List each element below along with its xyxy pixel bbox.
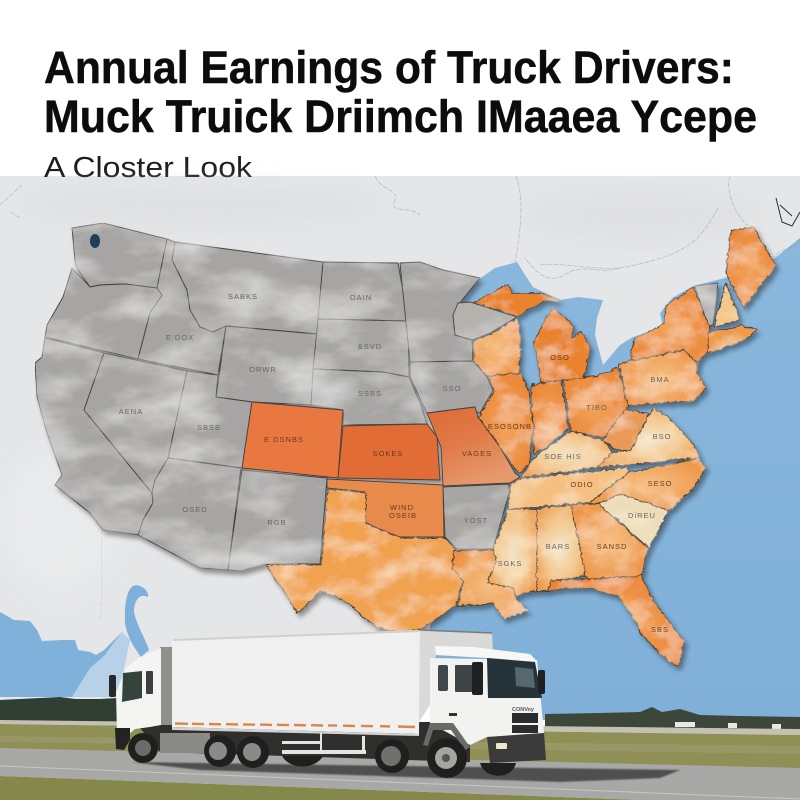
wisconsin south [472,318,520,375]
road [0,748,800,800]
michigan upper [472,283,560,315]
truck shadow [130,762,680,782]
west virginia [603,408,648,450]
state labels: BMA [650,375,670,384]
tree line right [545,707,800,730]
state labels: SOKES [373,449,403,458]
rear cab wheel [128,733,158,763]
rear cab [109,648,161,750]
ohio [562,367,627,437]
state labels: BSO [653,432,671,441]
door window [455,665,483,692]
florida [547,575,683,665]
bottom grass [0,776,800,800]
state labels: SBSB [197,423,221,432]
rear bumper [115,728,130,750]
michigan lower [533,307,590,382]
rear side window [438,665,448,691]
pacific inlet left [0,612,122,697]
tennessee [507,467,627,508]
land mottling [0,187,760,590]
oregon [45,268,162,359]
fuel tank [160,733,210,753]
title [44,42,757,142]
windshield [487,658,542,698]
oklahoma [327,479,444,537]
south dakota [313,319,409,377]
tree line left [0,697,117,722]
utah [168,371,252,468]
state labels: SABKS [228,292,258,301]
nevada [84,353,187,493]
state labels: DiREU [628,511,656,520]
california [35,338,153,535]
south carolina [598,493,668,547]
right mirror [538,670,545,694]
front bumper [487,733,546,763]
indiana [530,378,568,453]
state labels: E.DOX [166,333,194,342]
state labels: TIBO [586,403,608,412]
front wheel [427,738,467,778]
virginia [595,407,698,467]
drive wheel [375,739,409,773]
door handle [449,713,457,716]
kentucky [520,430,612,477]
state labels: SBS [651,625,669,634]
roof fairing [435,646,537,661]
state labels: YOST [464,516,488,525]
box extension behind front cab [419,630,493,722]
mississippi [487,508,536,595]
maine [725,226,775,307]
massachusetts and connecticut [707,325,757,353]
map background land [0,176,800,702]
gulf of california [125,585,149,657]
puget sound blotch [90,234,100,248]
state labels [119,292,672,634]
wheel arch [423,723,470,750]
idaho [138,239,226,375]
truck [109,630,546,778]
wheels [128,733,516,778]
canada and mexico outline details [0,176,800,620]
eastern orange states [265,226,775,665]
state labels: RGB [267,518,287,527]
state labels: WIND [390,503,414,512]
chassis underside [135,722,470,762]
header background [0,0,800,176]
alabama [536,504,585,590]
kansas [338,424,440,480]
horizon buildings [675,722,781,729]
arizona [138,458,241,570]
title: Annual Earnings of Truck Drivers: [44,42,734,93]
texas [265,488,462,632]
state labels: OSO [550,353,570,362]
state labels: VAGES [462,449,492,458]
grass field [0,724,800,772]
state labels: SGKS [498,559,522,568]
state labels: &SVD [358,342,382,351]
grille [512,713,538,733]
side guard rails [282,733,366,754]
state labels: OAIN [350,293,372,302]
ocean and great lakes [430,238,800,720]
nebraska [311,369,427,425]
state labels: ORWR [249,365,277,374]
wyoming [216,326,317,405]
minnesota [400,262,480,362]
state labels: ODIO [570,480,594,489]
title: Muck Truick Driimch IMaaea Ycepe [44,91,757,142]
road edge line [0,766,800,799]
tandem wheel two [237,736,269,768]
new york [630,286,708,362]
state labels: ESOSONB [488,422,532,431]
state labels: OSEIB [389,511,417,520]
iowa [410,361,493,413]
wisconsin gray north [453,302,517,340]
subtitle: A Closter Look [44,152,253,184]
cargo box [172,630,420,736]
washington [72,223,167,288]
pennsylvania [618,349,705,405]
montana [172,242,323,334]
state labels: E DSNBS [264,435,304,444]
icon: top right coastline mark [776,198,800,226]
state labels: OSED [182,505,208,514]
vermont [695,283,718,326]
north carolina [588,457,705,510]
pale water wedge left [72,632,130,697]
front cab [423,646,546,763]
grass lighter band [0,736,800,754]
hidden wheel [282,756,323,766]
far front wheel [480,763,516,776]
illinois [478,373,533,473]
headlight [496,743,507,749]
colorado [242,402,343,478]
pale runway strip [0,720,800,735]
us map [35,223,775,665]
state labels: BARS [546,542,570,551]
state labels: AENA [119,407,143,416]
new mexico [228,470,327,571]
rear cab side window [146,671,153,694]
rear cab mirror [109,675,116,697]
new hampshire [713,282,738,326]
georgia [570,503,647,578]
state labels: SSBS [358,389,382,398]
state labels: SANSD [597,542,627,551]
rear cab windshield [122,671,142,702]
arkansas [443,484,510,549]
missouri [427,407,520,486]
state labels: SOE HIS [544,452,582,461]
gray western states [35,223,718,571]
louisiana [452,549,527,618]
tandem wheel one [204,735,236,767]
state labels: SSO [443,384,461,393]
rear cab gap [160,647,173,725]
brand text: CONVoy [512,707,535,713]
orange highlighted states [242,402,520,537]
state labels: SESO [648,479,672,488]
north dakota [318,262,408,321]
left mirror [472,662,483,695]
orange reflector strips [175,724,415,727]
